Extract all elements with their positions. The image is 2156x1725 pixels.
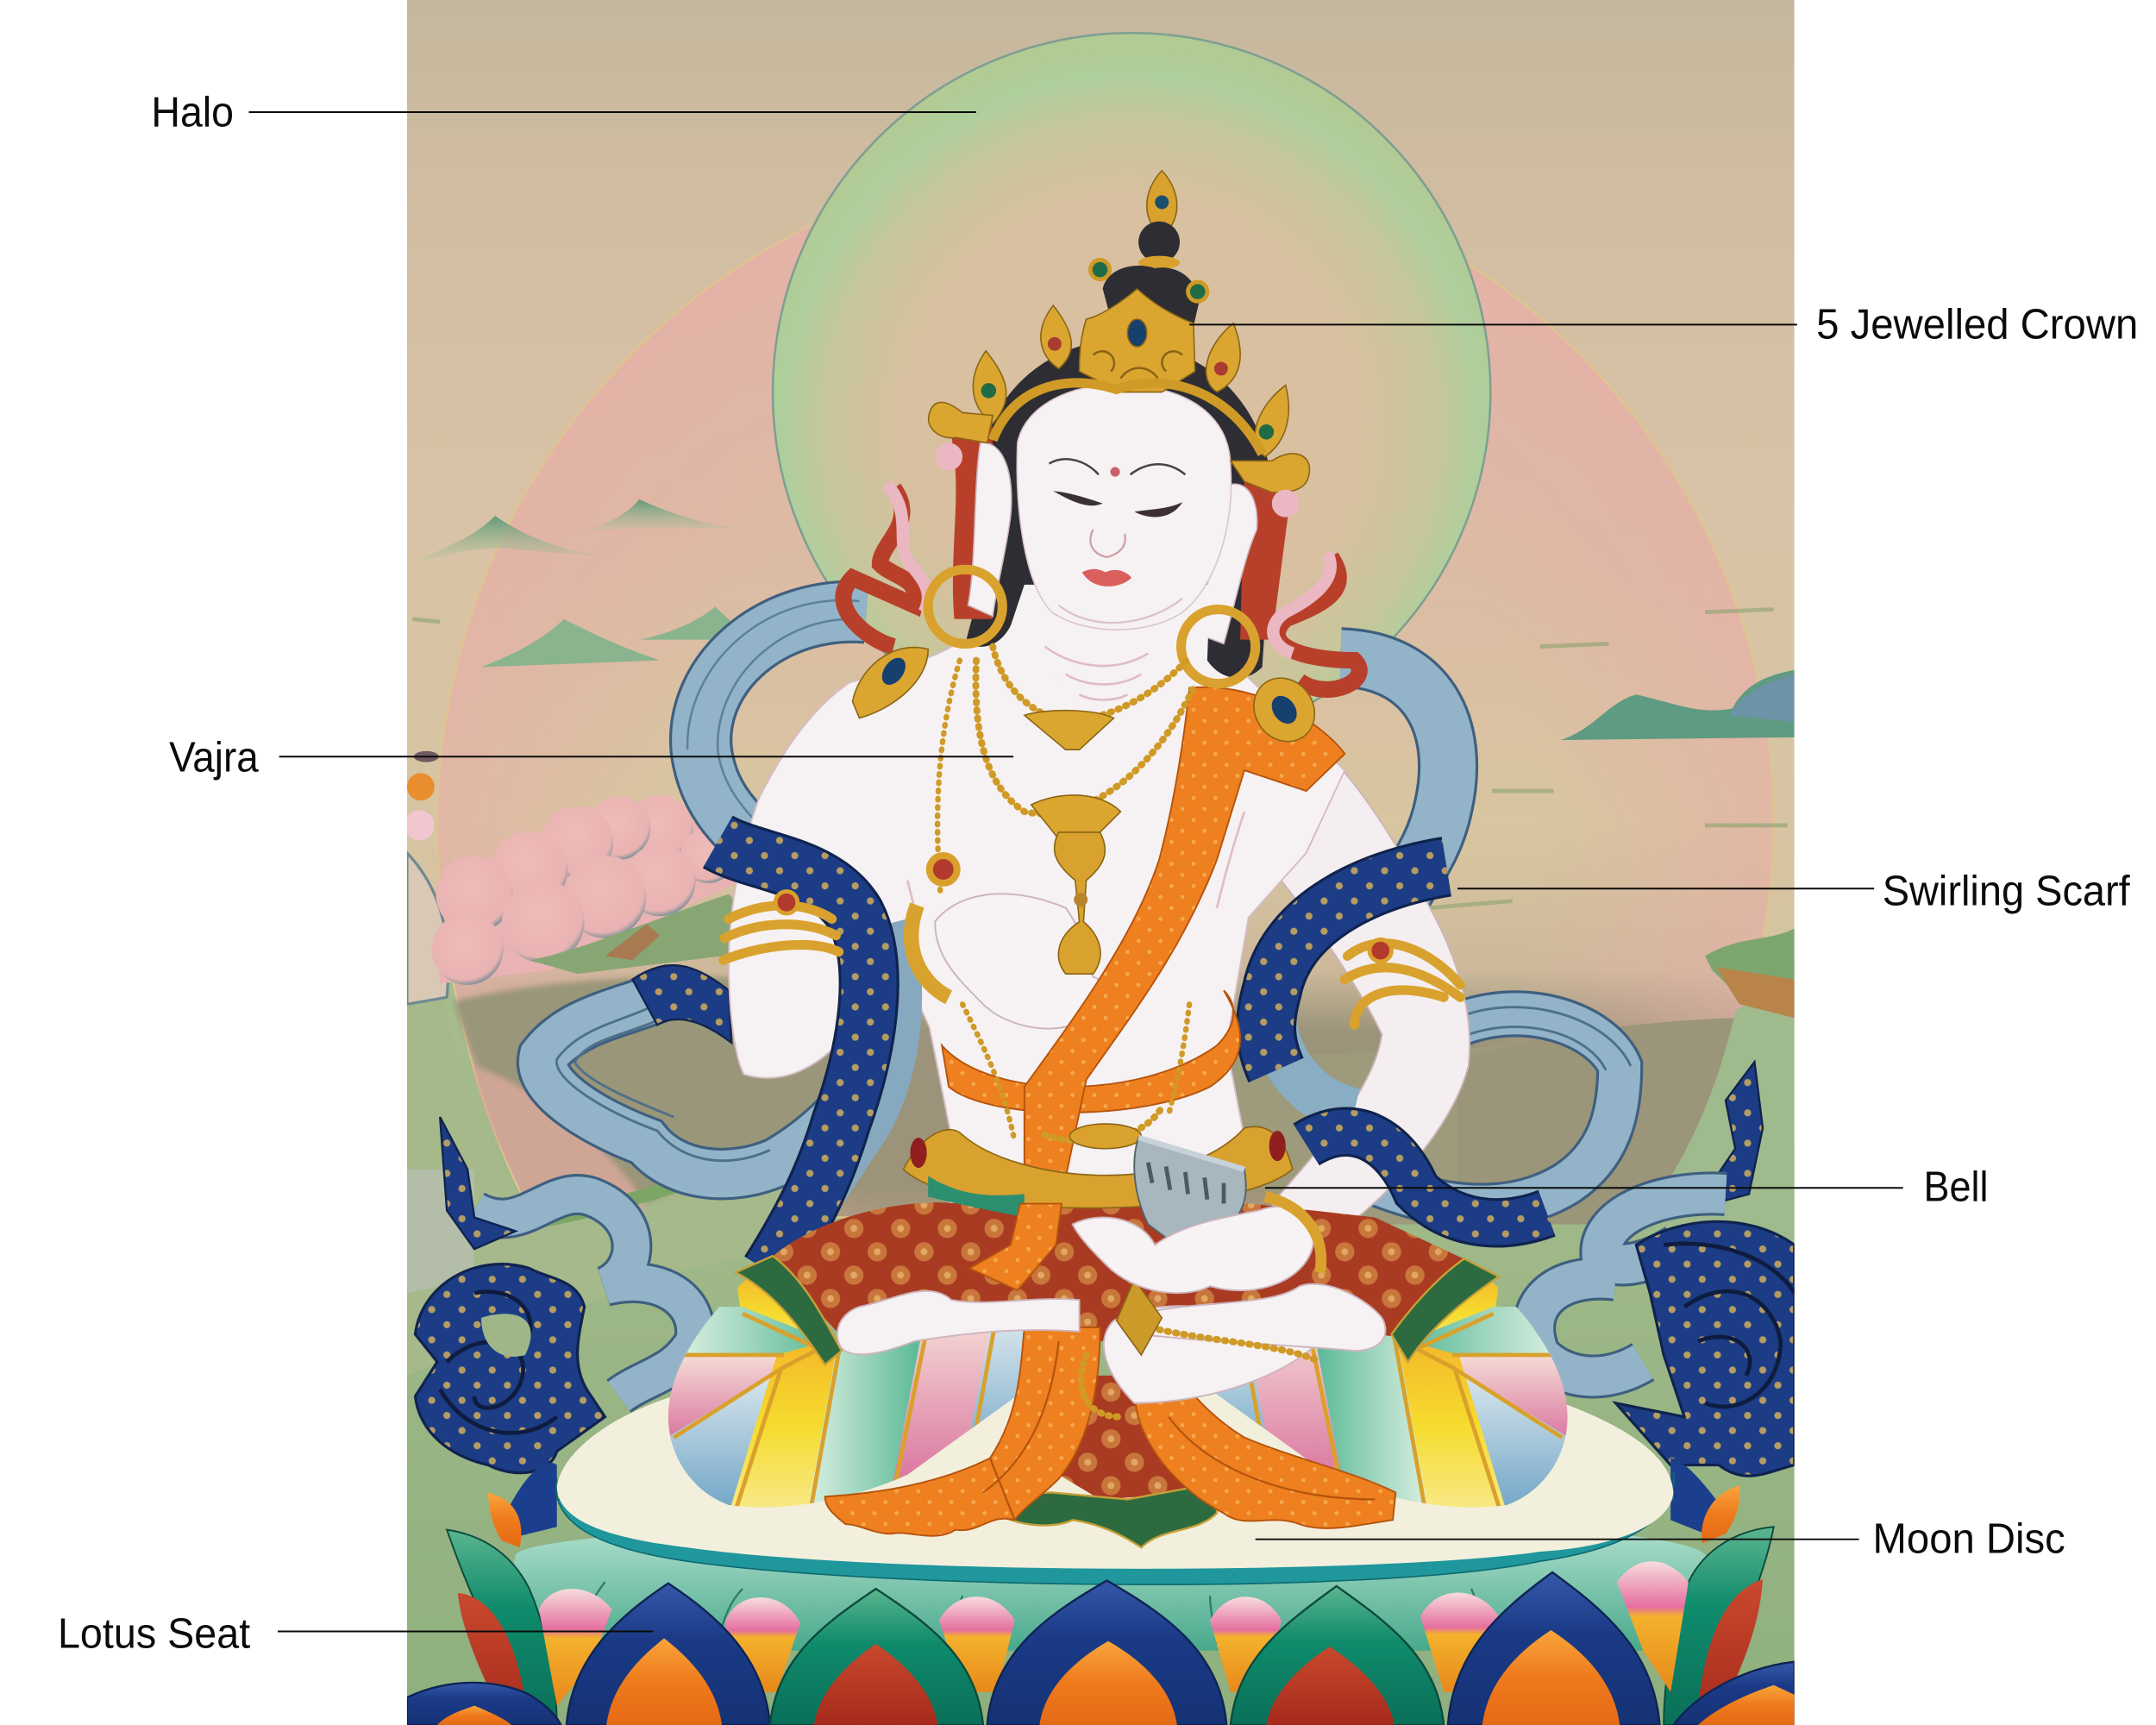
stripe: blue right (1455, 1369, 1569, 1513)
long bead strand (937, 661, 1189, 1142)
crown petal 1 gem (1048, 337, 1062, 351)
stripe: blue (962, 1314, 1059, 1472)
shoulder medallion right (1242, 666, 1327, 754)
crown petal 2 (973, 351, 1006, 423)
bell body (1134, 1138, 1246, 1245)
stripe: yellow top (736, 1272, 832, 1355)
line: lotus seat (278, 1631, 653, 1633)
island: middle right (640, 607, 731, 640)
big blue petal 3 (1448, 1572, 1659, 1725)
hair behind neck (965, 341, 1272, 678)
label: Swirling Scarf: Swirling Scarf (1883, 867, 2130, 914)
stripe: mint right 2 (1307, 1323, 1427, 1506)
bottom blue petal left (407, 1683, 561, 1725)
island: middle left (481, 619, 660, 668)
earring right (1181, 610, 1256, 684)
light scarf upper right (1341, 657, 1448, 894)
left grey hill (454, 975, 762, 1204)
right green hill (1671, 963, 1795, 1244)
light scarf upper left (701, 612, 866, 881)
crown side ornament left (929, 402, 993, 443)
orange drape right fold (1169, 1417, 1375, 1499)
red dhoti (770, 1202, 1478, 1341)
crown petal 3 gem (1214, 361, 1228, 375)
face (1017, 385, 1232, 630)
torso and left arm (729, 585, 1344, 1217)
dark back petal right (1670, 1458, 1726, 1534)
dark ribbon mass right (1615, 1221, 1795, 1476)
stripe: blue right 2 (1177, 1314, 1273, 1472)
island: far right hills (1561, 670, 1795, 740)
right arm (1258, 736, 1470, 1245)
sash across torso (1025, 687, 1344, 1211)
gold waist belt (904, 1126, 1293, 1208)
bud 6 (1617, 1561, 1689, 1692)
island: top (572, 499, 736, 534)
stripe: mint (809, 1323, 928, 1506)
right grey hill (1513, 1018, 1733, 1225)
painting background (407, 0, 1795, 1725)
light ribbon right fill (1534, 1194, 1726, 1377)
shoulder medallion left (853, 648, 928, 718)
label: Lotus Seat: Lotus Seat (58, 1610, 250, 1658)
bindi (1110, 467, 1120, 477)
long necklace (976, 661, 1194, 813)
topknot (1103, 266, 1199, 344)
outer green petal right (1664, 1527, 1774, 1725)
ground window inside scarf (481, 1314, 531, 1357)
label: Vajra: Vajra (169, 734, 259, 781)
right ear (1201, 484, 1257, 643)
red ribbon behind right ear (1240, 474, 1290, 640)
cloud base (439, 811, 743, 983)
lower-left rocks and water (407, 1170, 474, 1293)
stripe: mint (680, 1307, 839, 1376)
crown petal 3 (1206, 323, 1240, 392)
halo (773, 33, 1490, 751)
green gem right (1188, 282, 1207, 301)
right loop outline (1375, 1013, 1620, 1207)
lotus seat (407, 1383, 1795, 1725)
neck creases (1045, 647, 1148, 699)
head (843, 341, 1359, 701)
long pendant (1031, 795, 1120, 839)
rainbow leg right (1177, 1272, 1576, 1513)
crown central plate (1080, 289, 1195, 392)
small orange petal right (1702, 1485, 1739, 1543)
crown petal 4 (1255, 386, 1288, 457)
waist gem right (1269, 1131, 1286, 1161)
figure (660, 171, 1576, 1547)
dark blue scarf across right forearm (1307, 1132, 1547, 1223)
big blue petal 2 (987, 1581, 1226, 1725)
crown scroll lines (1094, 351, 1182, 379)
stripe: mint right (1397, 1307, 1555, 1376)
ankle chain (1081, 1320, 1320, 1417)
green under-belt (928, 1176, 1025, 1217)
grass tufts (412, 610, 1788, 908)
light scarf fold lines (687, 600, 859, 867)
waist necklace (1045, 1107, 1162, 1141)
green gem left (1090, 260, 1110, 279)
crown central gem (1127, 319, 1147, 347)
eyes (1053, 491, 1182, 517)
pink flower (404, 810, 435, 840)
top finial (1147, 171, 1177, 226)
bud 3 (939, 1596, 1015, 1692)
stripe: yellow top right (1404, 1272, 1500, 1355)
right loop fold line (1464, 1007, 1631, 1070)
light scarf band by left arm (791, 922, 906, 1251)
vajra tassel ornament (1117, 1279, 1162, 1355)
landscape islands (404, 499, 1795, 1018)
line: vajra (279, 756, 1013, 757)
right ribbon pink (1273, 553, 1331, 654)
scarf lower left (416, 1117, 695, 1473)
armlet gem left (775, 891, 798, 913)
light ribbon left fill (474, 1195, 695, 1396)
top hair ball (1138, 222, 1180, 263)
centre red cloth (1031, 1376, 1203, 1499)
line: scarf (1457, 888, 1874, 889)
dark blue scarf across right forearm pattern (1307, 1132, 1547, 1223)
cloud lobes (432, 795, 736, 985)
gold collar (1138, 256, 1180, 270)
crown petal 2 gem (981, 383, 996, 398)
neck (1004, 585, 1210, 701)
dark ribbon curls right (1664, 1244, 1795, 1407)
dark blue scarf left hanging (718, 842, 869, 1272)
small left water stone (414, 751, 439, 762)
dark blue scarf left hanging pattern (718, 842, 869, 1272)
bottom blue petal right (1673, 1662, 1795, 1725)
line: moon disc (1256, 1539, 1859, 1540)
dark ribbon curls (440, 1292, 557, 1433)
bottom orange petal right (1698, 1685, 1795, 1725)
upper armlet left (724, 906, 839, 960)
orange drape left fold (983, 1341, 1059, 1520)
rainbow leg left (660, 1272, 1059, 1513)
short necklace (993, 647, 1189, 722)
crown (929, 171, 1309, 518)
teal rim of moon (556, 1472, 1674, 1584)
cloud left column (407, 853, 448, 1004)
flower band left (530, 1149, 770, 1228)
light ribbon left (474, 1195, 695, 1396)
chin lines (1059, 599, 1182, 623)
nose (1090, 530, 1125, 557)
dark ribbon tip (1698, 1062, 1763, 1208)
brown rock (605, 925, 660, 960)
finial gem (1155, 195, 1169, 209)
label: Halo: Halo (151, 89, 234, 136)
bud 1 (539, 1589, 612, 1706)
dhoti green cuff right (1392, 1258, 1499, 1362)
orange drape left (825, 1327, 1100, 1536)
moon disc (557, 1383, 1673, 1569)
big blue petal 1 (567, 1584, 770, 1725)
centre green hem (985, 1483, 1217, 1547)
orange flower (407, 773, 435, 800)
mint petal row (495, 1518, 1726, 1651)
short necklace pendant (1025, 711, 1113, 750)
chest shading (907, 812, 1244, 908)
dark blue scarf right upper (1266, 867, 1446, 1070)
crown petal 4 gem (1259, 424, 1274, 440)
bell engraving (1148, 1163, 1224, 1204)
left hand (935, 894, 1111, 1029)
bud 2 (724, 1597, 800, 1692)
bell (1134, 1138, 1246, 1245)
clouds (407, 795, 777, 1004)
green hillside left (407, 1189, 783, 1375)
crown side ornament right (1231, 454, 1309, 492)
scarves back (542, 600, 1631, 1207)
dark back petal left (506, 1463, 557, 1538)
bead strand jewel (930, 856, 957, 883)
shin (1104, 1306, 1320, 1403)
light scarf upper left outline (701, 612, 866, 881)
red ribbon behind left ear (951, 426, 993, 619)
bell hand (1073, 1206, 1314, 1293)
crown petal 1 (1041, 305, 1071, 368)
leader lines (249, 112, 1903, 1632)
stripe: pink (891, 1314, 997, 1492)
bud 4 (1210, 1596, 1282, 1692)
waist pendant (1069, 1124, 1141, 1149)
light scarf under right dark band (1272, 1004, 1354, 1112)
tip of dark ribbon (440, 1117, 516, 1249)
big green petal 1 (770, 1589, 983, 1725)
red petal right (1694, 1579, 1763, 1725)
dhoti green cuff left (736, 1256, 842, 1364)
label: 5 Jewelled Crown: 5 Jewelled Crown (1816, 300, 2138, 348)
pink sun disc (437, 157, 1774, 1217)
left loop outline (542, 985, 880, 1174)
label: Moon Disc: Moon Disc (1873, 1515, 2065, 1563)
inner orange petal 3 (1482, 1630, 1620, 1725)
left loop fold line (556, 994, 770, 1161)
bell rim (1138, 1138, 1244, 1170)
right flowing ribbon (1277, 557, 1359, 689)
left ribbon pink (887, 484, 928, 612)
inner red petal 2 (1266, 1647, 1395, 1725)
left ear (968, 442, 1012, 617)
left foot (837, 1291, 1080, 1354)
right foot (1141, 1284, 1386, 1351)
stripe: yellow (729, 1337, 842, 1513)
stripe separators (674, 1314, 997, 1510)
orange sash tail (969, 1204, 1062, 1290)
orange drape right (1134, 1383, 1395, 1528)
stripe: blue (667, 1369, 781, 1513)
dark scarf end near left loop (632, 965, 731, 1043)
outer green petal left (447, 1530, 557, 1725)
stripe: pink (660, 1355, 784, 1445)
rock at far right (1730, 674, 1795, 722)
pink flower left (935, 443, 962, 470)
pink buds (539, 1561, 1689, 1706)
earring left (928, 569, 1002, 643)
right cliff (1705, 929, 1795, 1011)
light scarf upper right outline (1341, 657, 1448, 894)
left loop light scarf (542, 985, 880, 1174)
lips (1082, 569, 1131, 586)
pink lower left band (474, 1066, 646, 1211)
big green petal 2 (1231, 1586, 1444, 1725)
orange belt (942, 990, 1240, 1113)
bottom orange petal left (437, 1706, 511, 1725)
stripe: pink right (1452, 1355, 1576, 1445)
small orange petal left (488, 1492, 521, 1547)
waist gem left (910, 1138, 927, 1168)
upper armlet right (1344, 944, 1460, 1025)
stripe: pink right 2 (1239, 1314, 1344, 1492)
dark blue scarf right upper pattern (1266, 867, 1446, 1070)
centre olive ground (1361, 1160, 1457, 1225)
mint petal dividers (571, 1575, 1647, 1644)
stripe: yellow right (1395, 1337, 1507, 1513)
panel: painting (404, 0, 1795, 1725)
green slope near clouds (530, 894, 777, 974)
island: upper left (416, 516, 605, 562)
dark ribbon mass (416, 1264, 605, 1473)
scarf lower right (1534, 1062, 1795, 1476)
inner orange petal 1 (606, 1639, 722, 1725)
inner orange petal 2 (1039, 1641, 1177, 1725)
right cliff rock (1716, 967, 1795, 1018)
line: bell (1265, 1187, 1903, 1189)
bell wrist bangle (1265, 1197, 1321, 1272)
eyebrows (1050, 459, 1185, 474)
light ribbon right (1534, 1194, 1726, 1377)
bud 5 (1420, 1592, 1499, 1692)
left flowing ribbon (843, 488, 916, 647)
armlet gem right (1369, 939, 1392, 962)
pink flower right (1272, 490, 1300, 518)
line: crown (1189, 323, 1797, 325)
vajra (1055, 832, 1105, 974)
stripe separators right (1239, 1314, 1562, 1510)
right loop light scarf (1375, 1013, 1620, 1207)
crown band (993, 383, 1263, 454)
line: halo (249, 111, 976, 113)
red petal left (458, 1593, 530, 1725)
label: Bell: Bell (1924, 1163, 1988, 1210)
wrist bangle left (912, 905, 949, 997)
inner red petal 1 (814, 1644, 937, 1725)
green ground (407, 949, 1795, 1725)
